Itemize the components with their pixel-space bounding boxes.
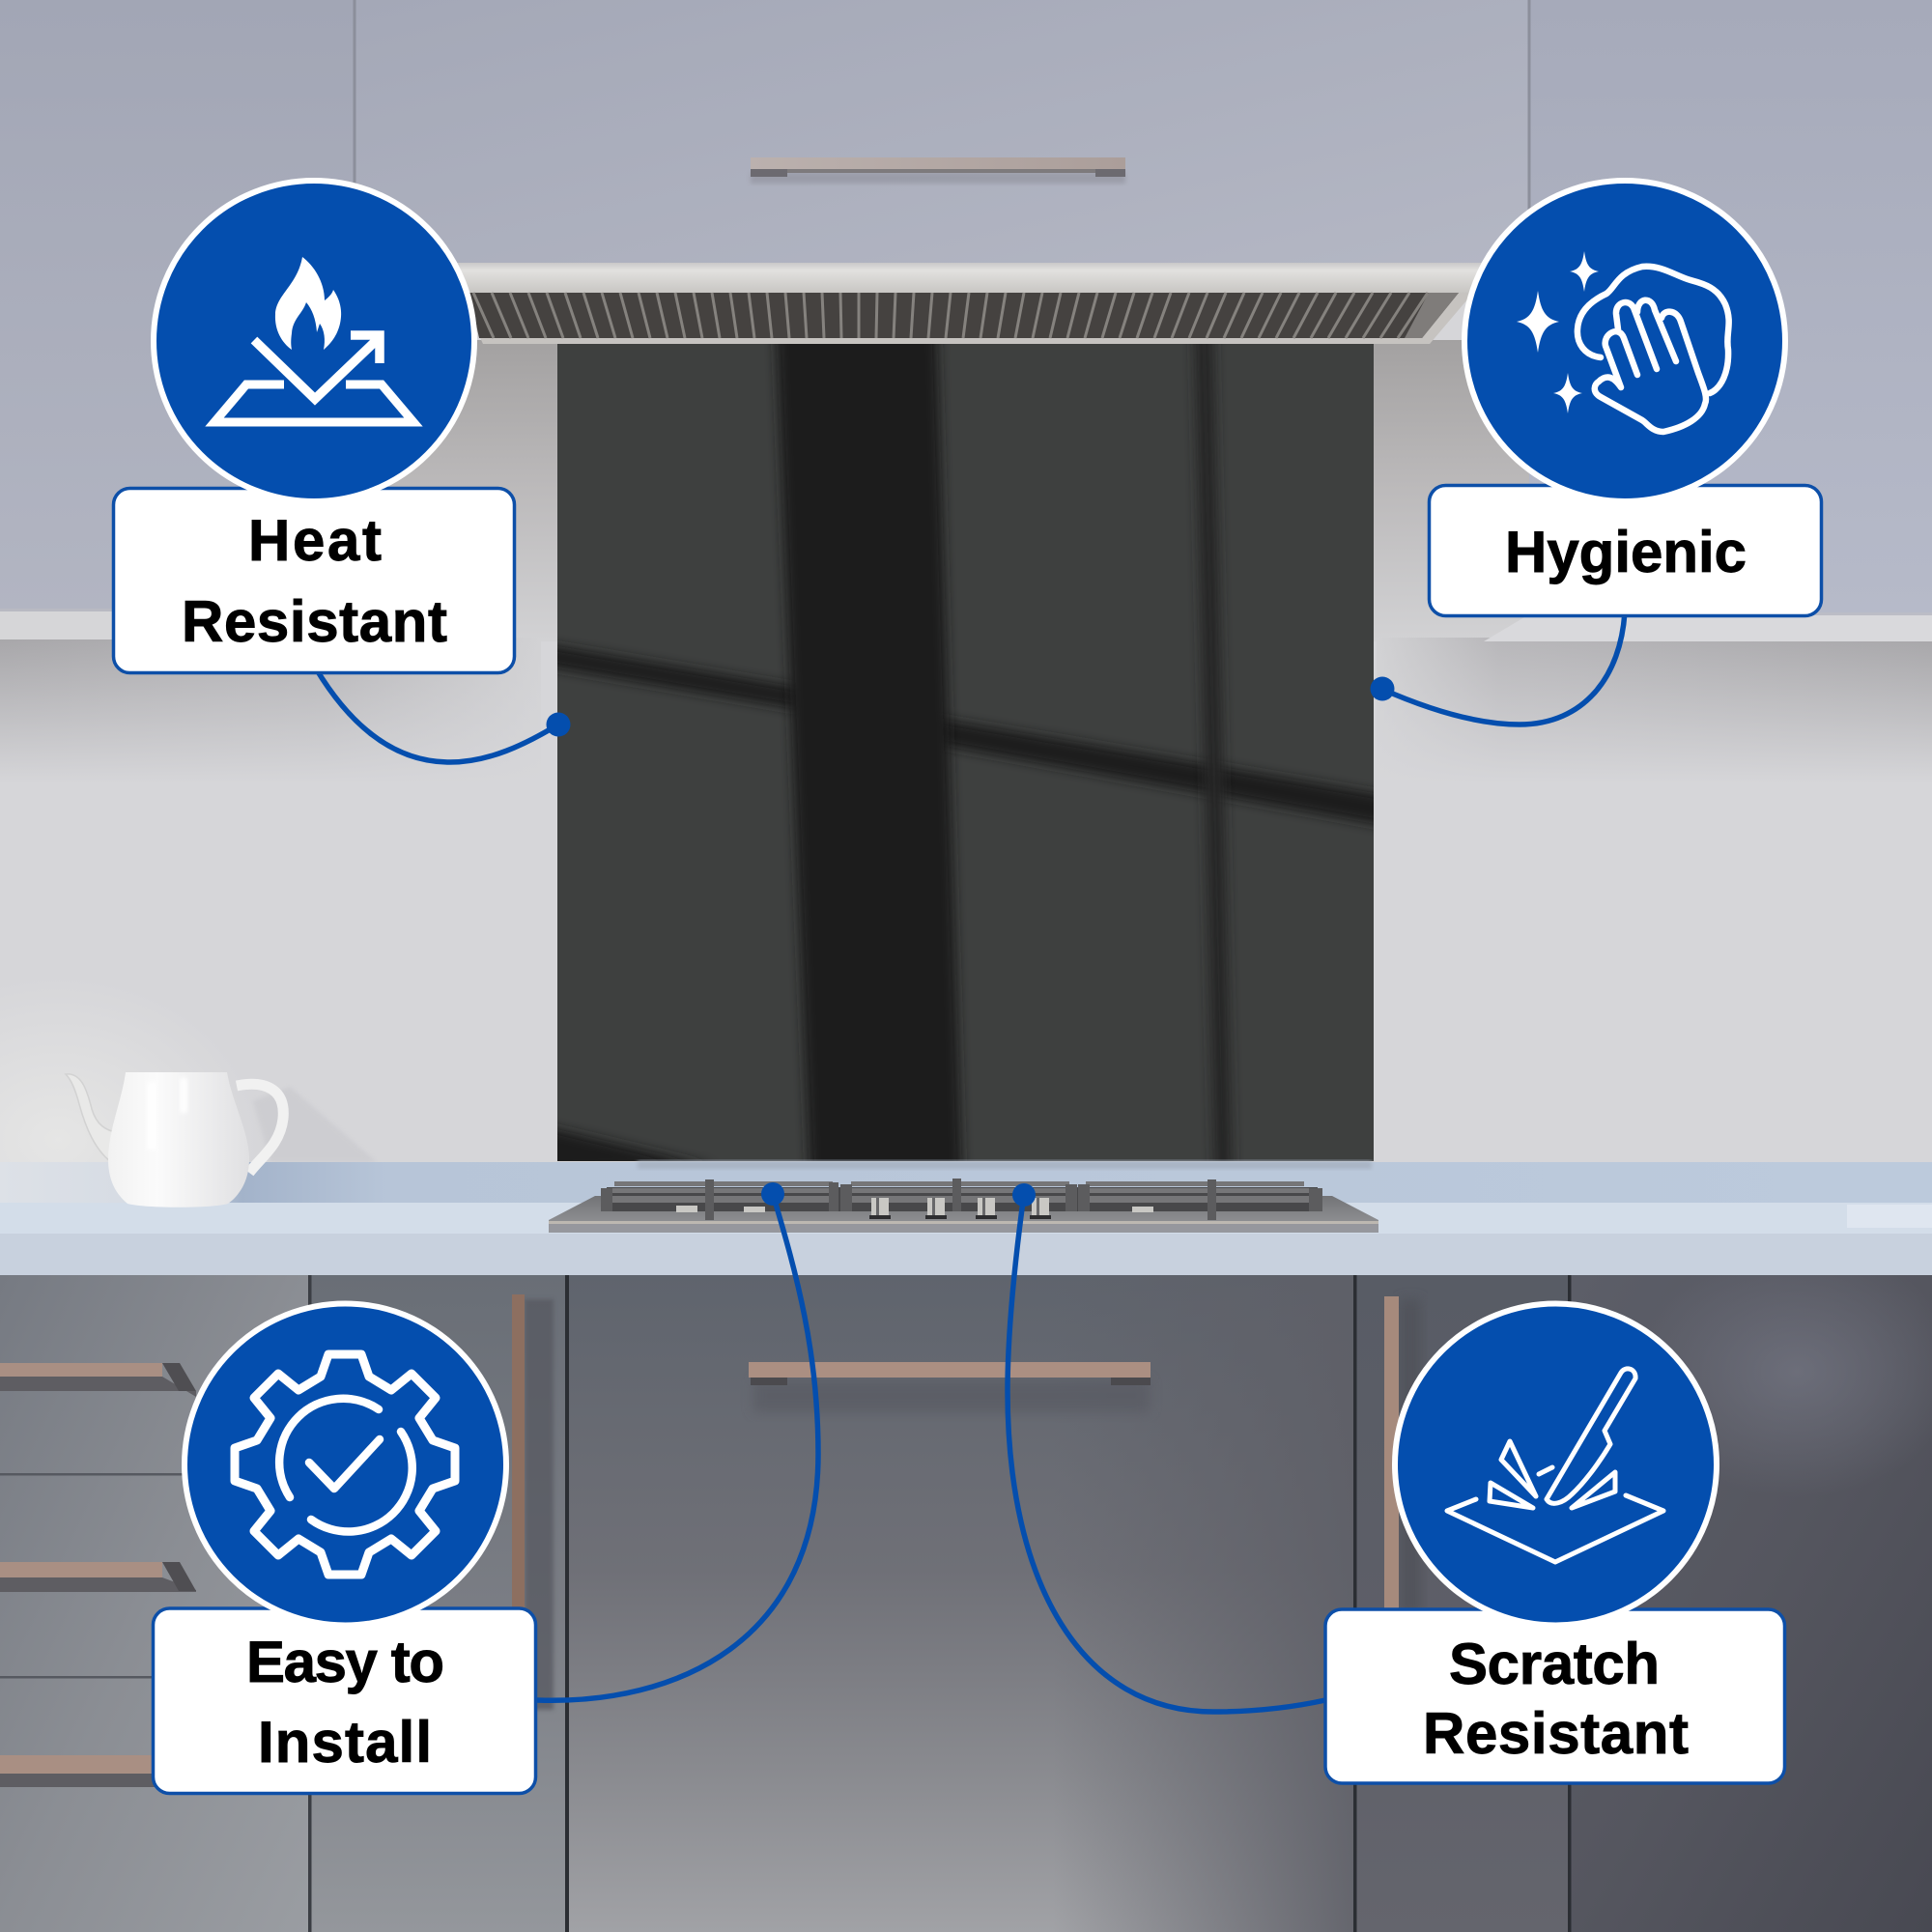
backsplash stripe and countertop: [0, 1161, 1932, 1276]
lower cabinets: [0, 1246, 1932, 1932]
label box: hygienic: [1430, 485, 1822, 616]
connector: hygienic: [1370, 611, 1625, 724]
label text: scratch resistant: Scratch: [1449, 1632, 1660, 1696]
icon: easy install badge: [185, 1304, 506, 1625]
drawer handles: [0, 1363, 196, 1787]
background: kitchen wall: [0, 0, 1932, 1304]
label text: heat resistant: Resistant: [182, 589, 447, 654]
feature: hygienic: [1430, 181, 1822, 616]
label box: scratch resistant: [1325, 1609, 1785, 1783]
icon: hygienic badge: [1464, 181, 1785, 501]
label text: hygienic: Hygienic: [1505, 520, 1747, 584]
icon: heat resistant badge: [154, 181, 474, 501]
label text: easy to install: Easy to: [246, 1630, 444, 1694]
range hood: [425, 263, 1507, 344]
connector: heat resistant: [316, 668, 570, 762]
upper cabinets: [0, 0, 1932, 641]
connector: scratch resistant: [1008, 1183, 1325, 1712]
connector: easy to install: [537, 1182, 818, 1700]
vertical cabinet handles: [512, 1294, 1421, 1710]
label box: heat resistant: [114, 489, 514, 672]
upper cabinet handle: [751, 157, 1125, 184]
feature: scratch resistant: [1325, 1304, 1785, 1783]
glass splashback panel: [541, 328, 1391, 1179]
feature: easy to install: [153, 1304, 535, 1793]
label text: easy to install: Install: [258, 1710, 432, 1775]
centre cabinet handle: [749, 1362, 1151, 1412]
icon: scratch resistant badge: [1395, 1304, 1717, 1625]
gas hob: [549, 1179, 1378, 1233]
label text: scratch resistant: Resistant: [1423, 1701, 1689, 1766]
label box: easy to install: [153, 1608, 535, 1793]
feature: heat resistant: [114, 181, 514, 672]
label text: heat resistant: Heat: [248, 508, 382, 573]
teapot: [66, 1072, 283, 1208]
